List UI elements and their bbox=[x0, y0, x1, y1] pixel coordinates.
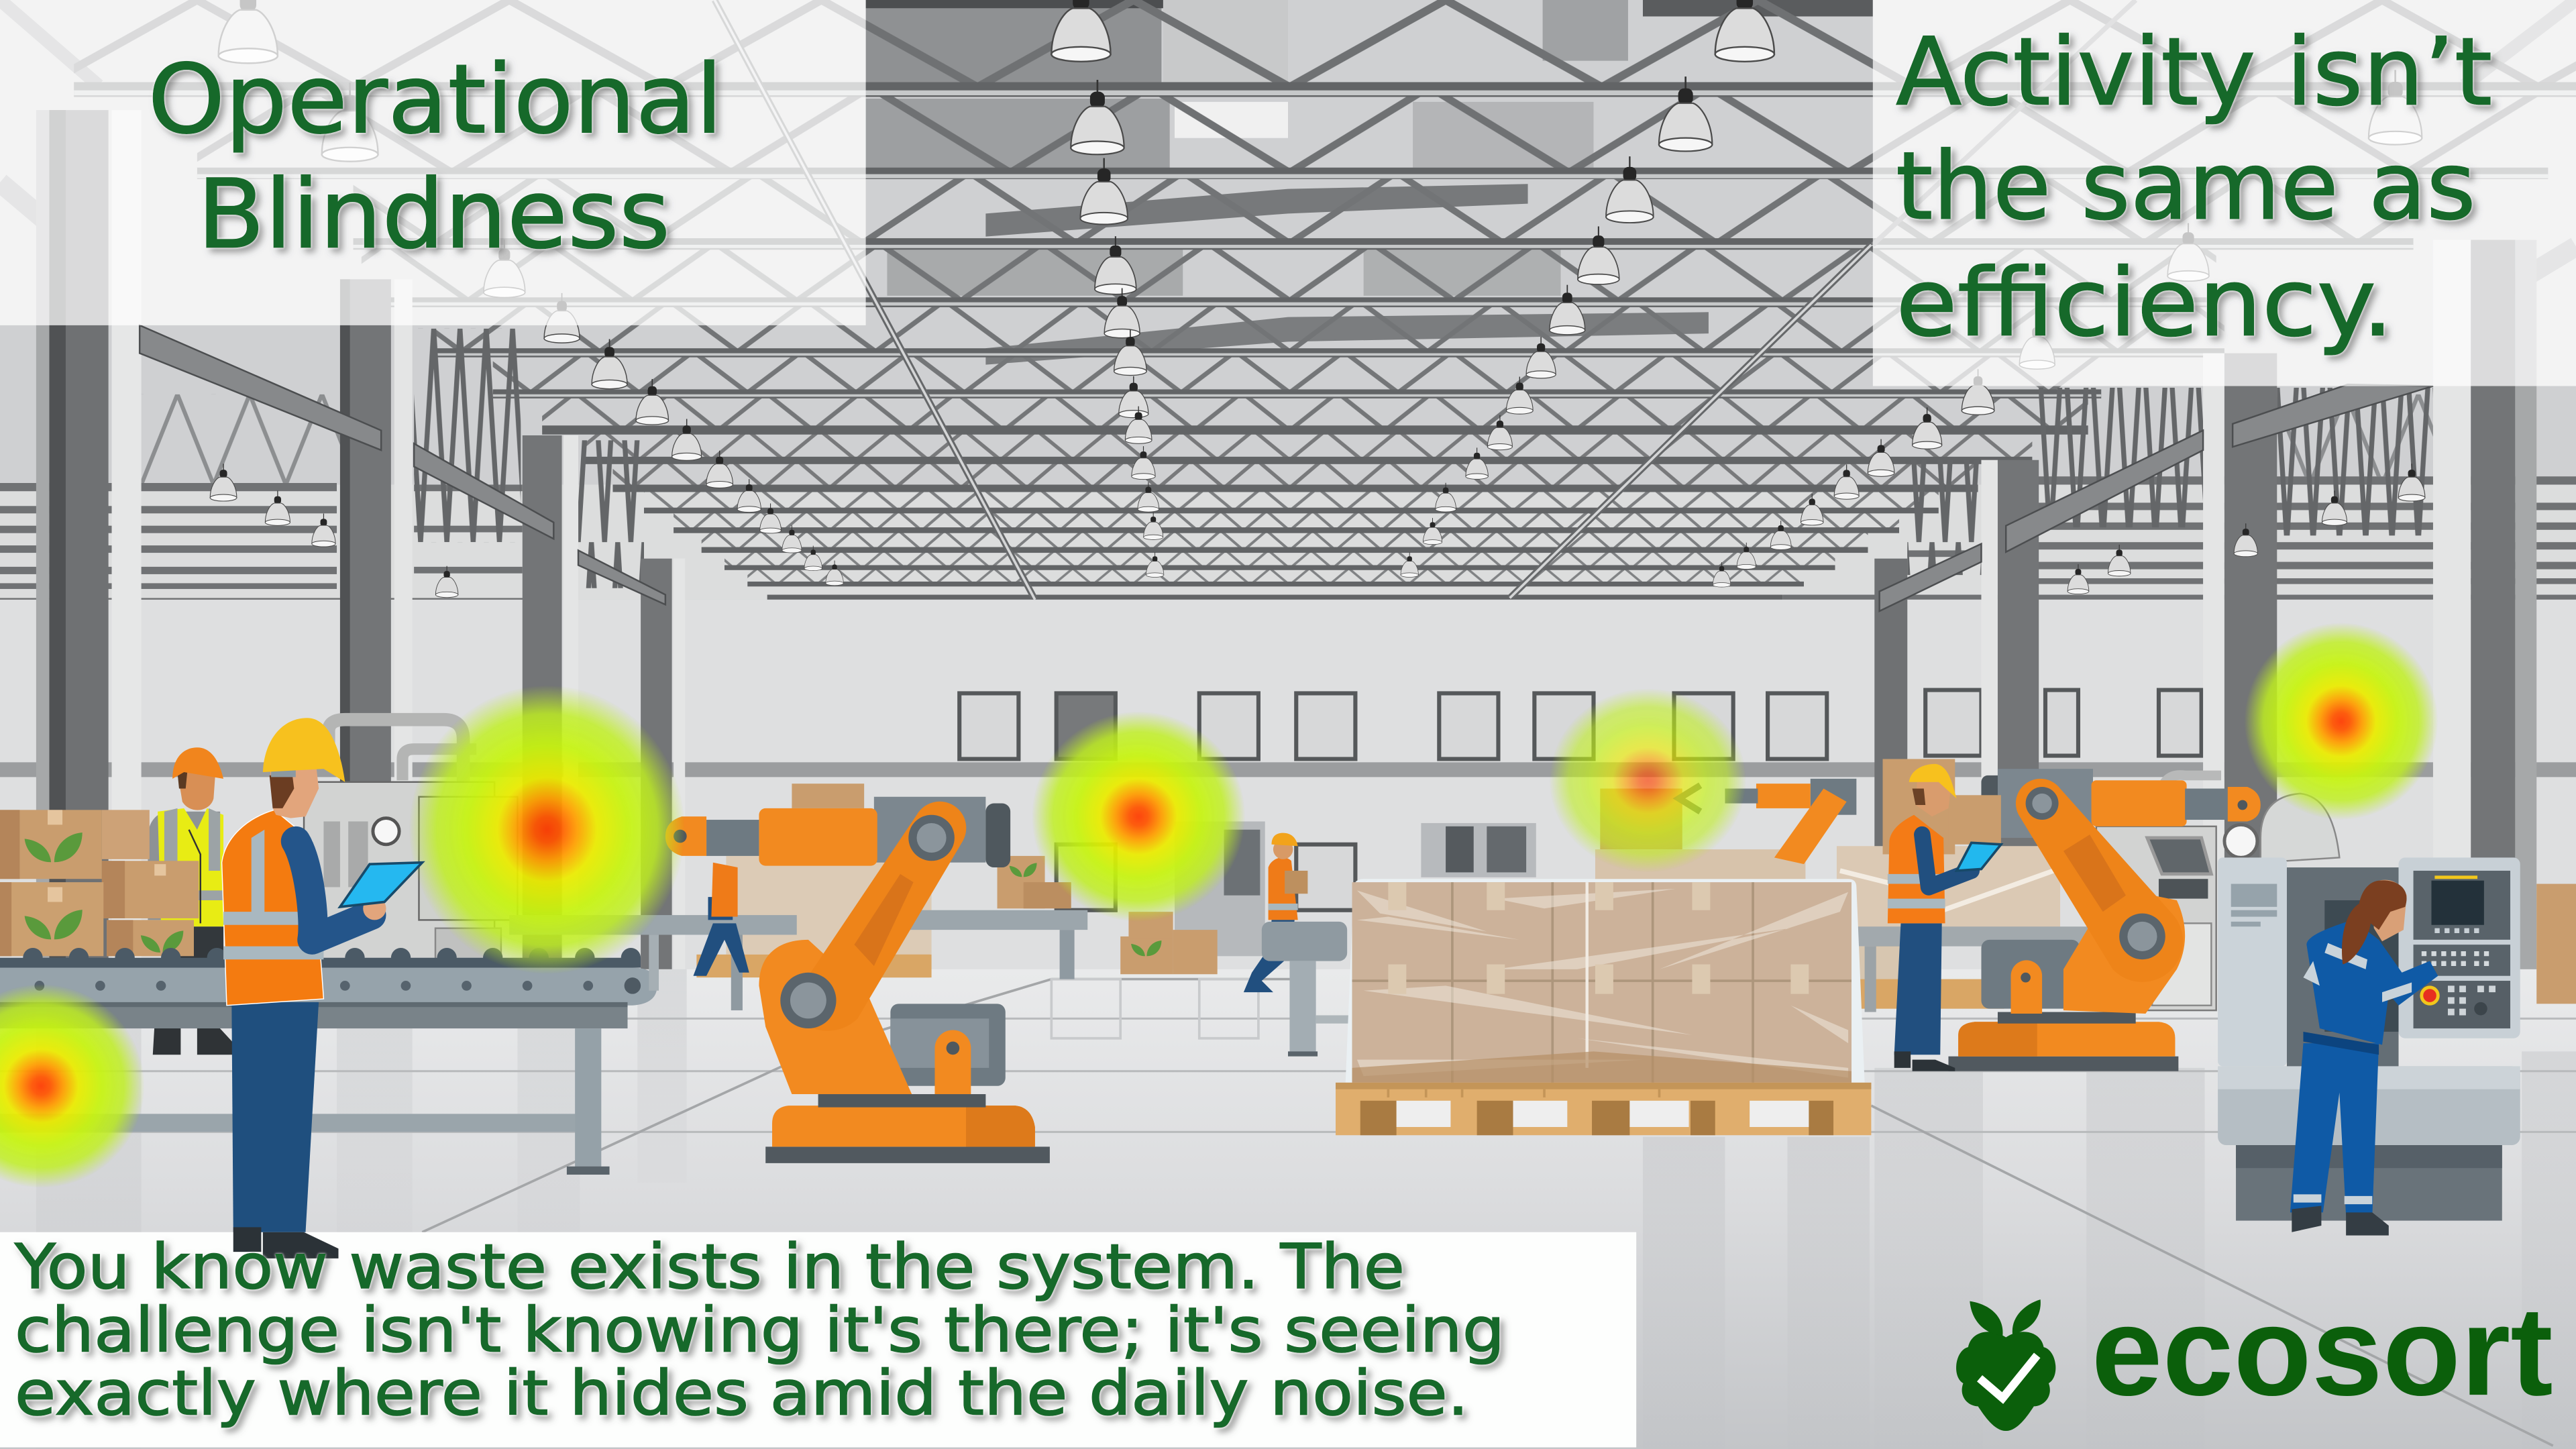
panel: title background bbox=[0, 0, 866, 325]
mid-ground boxes and machine bbox=[998, 821, 1265, 974]
caption text bbox=[14, 1231, 1505, 1430]
right pallet, conveyor and CNC background machine bbox=[1837, 775, 2339, 1012]
background machine and pipes behind left workers bbox=[304, 720, 517, 966]
ecosort logo bbox=[1956, 1280, 2553, 1431]
shrink-wrapped pallet of boxes bbox=[1346, 879, 1865, 1083]
back wall bbox=[0, 600, 2576, 977]
small distant robot arm bbox=[1679, 779, 1856, 864]
headline: Operational Blindness bbox=[148, 44, 723, 270]
steel columns bbox=[36, 110, 2536, 969]
orange safety vest bbox=[222, 810, 323, 1006]
head and hard hat bbox=[263, 718, 345, 818]
tablet bbox=[340, 863, 422, 907]
small worker by the centre conveyor bbox=[1244, 833, 1349, 1057]
mid-ground pallet, conveyor and small worker bbox=[509, 784, 1087, 1010]
tagline: Activity isn't the same as efficiency: efficiency. bbox=[1896, 248, 2394, 358]
side wall trusses bbox=[0, 329, 2576, 603]
stacked cardboard boxes left bbox=[0, 810, 199, 956]
robot arm: centre-left bbox=[665, 797, 1050, 1163]
tagline: Activity isn't the same as efficiency: Activity isn’t bbox=[1896, 17, 2492, 127]
wooden pallet bbox=[1336, 1083, 1871, 1135]
headline: Operational Blindness: Blindness bbox=[197, 160, 670, 270]
left conveyor belt bbox=[0, 948, 657, 1175]
background worker: yellow vest bbox=[148, 747, 238, 1055]
roof trusses bbox=[74, 0, 2576, 600]
CNC machine bbox=[2218, 857, 2520, 1221]
caption text: You know waste exists in the system. The bbox=[14, 1231, 1405, 1303]
heat spots bbox=[0, 623, 2438, 1188]
wordmark: ecosort bbox=[2092, 1280, 2553, 1421]
ceiling lamps bbox=[210, 0, 2425, 598]
trousers and boots bbox=[231, 1002, 338, 1258]
panel: caption background bbox=[0, 1232, 1636, 1448]
tagline: Activity isn't the same as efficiency bbox=[1896, 17, 2492, 358]
caption text: challenge isn't knowing it's there; it's seeing bbox=[15, 1294, 1505, 1366]
worker in blue at the CNC console bbox=[2290, 880, 2438, 1236]
foreground robot arm: right bbox=[1948, 769, 2261, 1071]
tagline: Activity isn't the same as efficiency: the same as bbox=[1896, 131, 2476, 241]
boxes behind right worker bbox=[1883, 759, 2576, 1004]
foreground worker with tablet bbox=[222, 718, 422, 1258]
machine and pallet behind large pallet bbox=[1421, 789, 1805, 882]
ceiling backdrop bbox=[0, 0, 2576, 608]
factory floor bbox=[0, 969, 2576, 1449]
panel: tagline background bbox=[1873, 0, 2576, 386]
caption text: exactly where it hides amid the daily noise. bbox=[15, 1358, 1468, 1430]
icon: apple with leaves and check bbox=[1956, 1299, 2055, 1431]
worker with tablet: right bbox=[1888, 764, 2001, 1071]
headline: Operational Blindness: Operational bbox=[148, 44, 723, 155]
